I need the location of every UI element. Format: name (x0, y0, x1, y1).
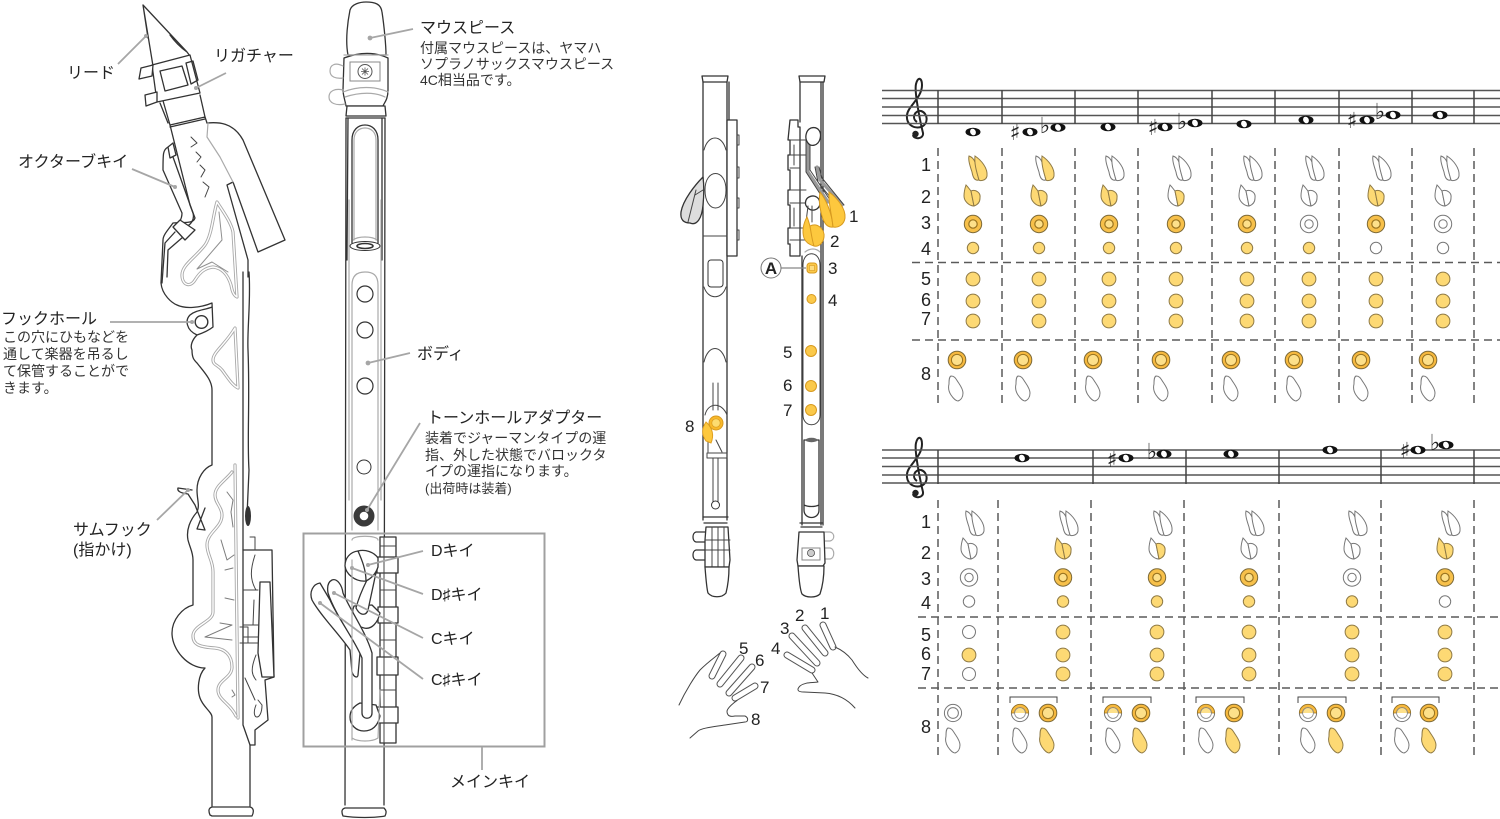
C key (328, 580, 372, 718)
key numbers: 3 (828, 259, 837, 278)
row numbers: 2 (921, 543, 931, 563)
row numbers: 7 (921, 309, 931, 329)
row numbers: 8 (921, 364, 931, 384)
clef (907, 438, 927, 497)
fingering chart 1 (912, 148, 1500, 403)
tone holes (357, 286, 373, 474)
label: reed: リード (67, 65, 115, 82)
thumb rest slot (708, 260, 723, 287)
marker A (761, 258, 806, 278)
adapter description: 装着でジャーマンタイプの運 (425, 430, 606, 446)
key numbers: 6 (783, 376, 792, 395)
column 7 (1352, 156, 1391, 401)
adapter description: (出荷時は装着) (425, 481, 512, 496)
column 6 (1285, 156, 1324, 401)
frame: main keys (304, 534, 544, 746)
yellow keys 2 (803, 217, 824, 246)
number 8: 8 (685, 417, 694, 436)
key plate (258, 582, 274, 677)
C sharp key (311, 583, 360, 677)
label: thumb hook: サムフック (73, 521, 152, 539)
right hand illustration (771, 604, 868, 708)
number labels: 1 (820, 604, 829, 623)
tone hole plate (803, 254, 820, 425)
label: octave key: オクターブキイ (18, 152, 128, 171)
mouthpiece (798, 566, 824, 597)
side bar (727, 120, 737, 256)
octave key (162, 143, 193, 283)
row numbers (921, 155, 931, 384)
tone holes 4 to 7 (806, 294, 816, 416)
column 5 (1222, 156, 1262, 401)
column 2 (1014, 156, 1054, 401)
window (804, 440, 819, 518)
ligature (797, 532, 825, 566)
notes: ♯ (1010, 121, 1020, 146)
key stack (788, 120, 800, 256)
inner contour upper (182, 202, 237, 297)
row numbers: 5 (921, 269, 931, 289)
inner folds (205, 492, 235, 697)
body shading (349, 200, 381, 500)
staff lines (882, 90, 1500, 124)
grid (912, 148, 1500, 403)
lower ring (703, 517, 728, 523)
number labels (739, 639, 769, 729)
hook hole description: 通して楽器を吊るし (3, 346, 129, 362)
flute bell (342, 808, 386, 818)
hand outline (679, 653, 748, 738)
lower key post (350, 703, 380, 731)
notes: ♭ (1177, 110, 1187, 135)
notes: ♭ (1430, 431, 1440, 456)
flange (702, 76, 728, 82)
key stack details (240, 537, 262, 717)
upper rod post (806, 128, 821, 145)
staff lines (882, 450, 1500, 483)
thumb hook (178, 488, 205, 530)
saxophone front view (311, 2, 398, 818)
row numbers: 2 (921, 187, 931, 207)
row numbers: 3 (921, 569, 931, 589)
row numbers: 1 (921, 155, 931, 175)
body tube (345, 118, 385, 805)
key numbers (783, 207, 858, 420)
notes: ♯ (1400, 439, 1410, 464)
row numbers: 3 (921, 213, 931, 233)
row numbers: 6 (921, 644, 931, 664)
window slot (352, 125, 378, 243)
tone hole plate (352, 272, 378, 530)
barlines (938, 90, 1474, 124)
inner contour second (213, 328, 238, 388)
adapter description: イプの運指になります。 (425, 463, 578, 479)
yellow thumb hole (709, 416, 723, 430)
column 2 (1010, 511, 1078, 753)
upper key rods (808, 138, 842, 205)
fingers (712, 654, 755, 698)
key numbers: 5 (783, 343, 792, 362)
label: hook hole: フックホール (1, 310, 97, 328)
notes (1014, 431, 1454, 473)
staff 2 (882, 431, 1500, 497)
number labels: 6 (755, 651, 764, 670)
tone hole adapter (354, 506, 374, 526)
column 4 (1152, 156, 1191, 401)
number labels: 8 (751, 710, 760, 729)
label: body: ボディ (417, 344, 464, 363)
barlines (938, 450, 1474, 484)
yellow thumb leaf key (703, 422, 713, 443)
column 3 (1084, 156, 1124, 401)
column 1 (948, 156, 987, 401)
notes: ♭ (1375, 100, 1385, 125)
ligature (152, 55, 200, 102)
label: D sharp key: D♯キイ (431, 587, 483, 604)
number labels: 4 (771, 639, 780, 658)
hook hole description: この穴にひもなどを (3, 329, 129, 345)
number labels: 5 (739, 639, 748, 658)
ear rings (693, 532, 705, 560)
flange (799, 76, 825, 82)
hook hole description: きます。 (3, 380, 58, 396)
upper key rods (356, 568, 377, 614)
lower key post (805, 196, 820, 210)
label: main keys: メインキイ (450, 774, 530, 791)
hook hole description: て保管することがで (3, 363, 129, 379)
D key and D sharp key (345, 550, 378, 581)
number labels: 2 (795, 606, 804, 625)
clef (907, 79, 927, 138)
label: D key: Dキイ (431, 543, 475, 560)
column 4 (1196, 511, 1264, 753)
row numbers: 6 (921, 290, 931, 310)
row numbers: 1 (921, 512, 931, 532)
socket ring (806, 438, 818, 442)
ligature (343, 54, 388, 106)
mouthpiece and reed (143, 5, 205, 125)
mouthpiece description: ソプラノサックスマウスピース (420, 56, 614, 72)
grid (918, 500, 1500, 755)
key numbers: 2 (830, 232, 839, 251)
mouthpiece (347, 2, 386, 55)
thumb rest dark (245, 506, 251, 526)
mouthpiece description: 付属マウスピースは、ヤマハ (420, 40, 601, 56)
side bar knobs (737, 135, 739, 240)
logo mark (191, 137, 209, 197)
octave leaf key (681, 177, 704, 224)
key numbers: 1 (849, 207, 858, 226)
column 8 (1419, 156, 1459, 401)
marker A: A (765, 259, 777, 278)
column 6 (1392, 511, 1460, 753)
column 5 (1298, 511, 1367, 753)
number labels: 3 (780, 619, 789, 638)
back view flute (681, 76, 739, 597)
label: thumb hook: (指かけ) (73, 541, 132, 559)
fingering chart 2 (918, 500, 1500, 755)
ligature badge (350, 62, 380, 81)
notes: ♯ (1347, 109, 1357, 134)
label: C key: Cキイ (431, 631, 475, 648)
collar (800, 523, 823, 527)
crook inner line (207, 123, 233, 182)
label: tone hole adapter: トーンホールアダプター (427, 409, 602, 427)
upper key post (353, 605, 380, 628)
body outline (161, 117, 213, 806)
saxophone side view (139, 5, 285, 816)
row numbers: 5 (921, 625, 931, 645)
inner contour lower (193, 465, 238, 718)
tube (703, 82, 729, 520)
column 3 (1103, 511, 1172, 753)
mouthpiece (705, 567, 729, 597)
thumb bar end (712, 501, 720, 509)
yellow keys 1 (819, 192, 845, 227)
octave key guard (173, 220, 195, 240)
hand outline (798, 647, 868, 708)
label: ligature: リガチャー (214, 47, 294, 65)
mouthpiece description: 4C相当品です。 (420, 72, 520, 88)
number labels (771, 604, 829, 658)
hook hole (195, 316, 208, 328)
tone hole 3 adapter (807, 263, 817, 273)
ears (329, 64, 345, 105)
leader lines and dots (110, 29, 482, 770)
thumb key assembly (705, 383, 727, 502)
left hand illustration (679, 639, 769, 738)
row numbers: 7 (921, 664, 931, 684)
notes: ♭ (1040, 114, 1050, 139)
ear rings (825, 532, 834, 559)
row numbers (921, 512, 931, 737)
fingers (787, 625, 833, 670)
tube (800, 82, 823, 525)
bell (209, 745, 253, 816)
main key stack (373, 537, 398, 743)
label: mouthpiece: マウスピース (420, 19, 515, 37)
key numbers: 7 (783, 401, 792, 420)
neck band (346, 106, 386, 116)
front view flute (761, 76, 858, 597)
row numbers: 8 (921, 717, 931, 737)
neck crook (207, 123, 285, 550)
notes: ♭ (1147, 440, 1157, 465)
ligature screws (139, 65, 157, 106)
notes: ♯ (1107, 448, 1117, 473)
number labels: 7 (760, 678, 769, 697)
notes: ♯ (1148, 116, 1158, 141)
column 1 (944, 511, 984, 753)
key stack (243, 550, 274, 745)
socket ring (350, 237, 380, 250)
label: C sharp key: C♯キイ (431, 672, 483, 689)
staff 1 (882, 79, 1500, 146)
adapter description: 指、外した状態でバロックタ (425, 447, 606, 463)
badge (802, 548, 820, 560)
mouthpiece ligature (705, 527, 730, 567)
row numbers: 4 (921, 239, 931, 259)
notes (966, 100, 1448, 146)
row numbers: 4 (921, 593, 931, 613)
ligature band details (343, 55, 388, 97)
arcs and capsules (703, 138, 727, 362)
key numbers: 4 (828, 291, 837, 310)
